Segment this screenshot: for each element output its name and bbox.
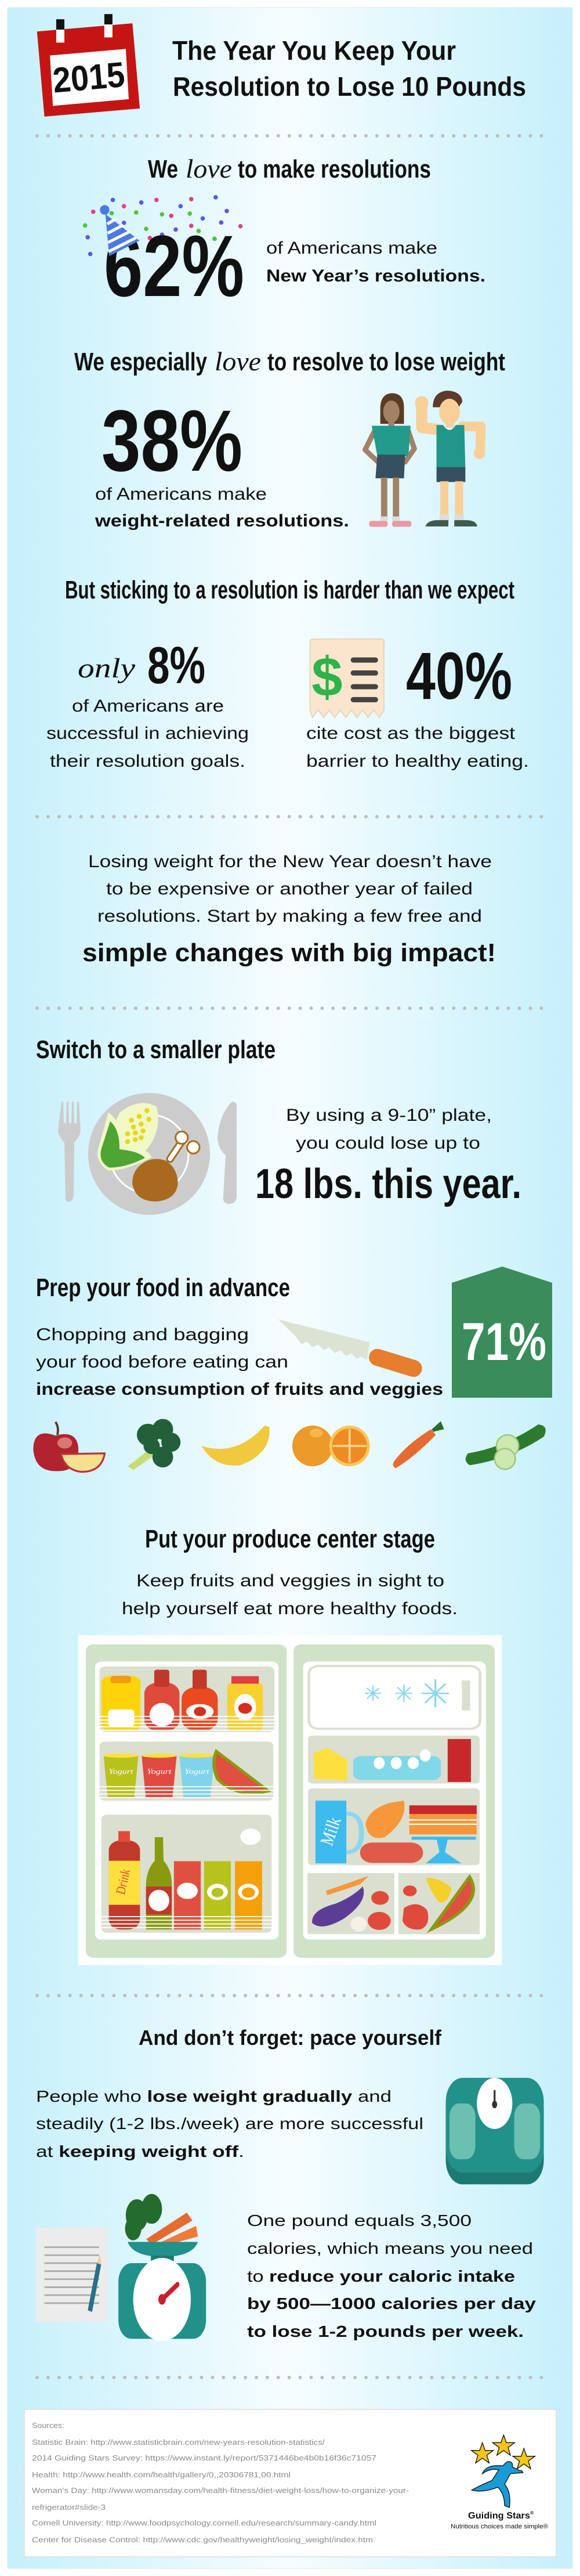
text: lose weight gradually [36,2087,423,2160]
intro paragraph: simple changes with big impact! [82,939,496,967]
text: one pound equals 3500 calories: to lose 1-2 pounds per week. [247,2322,524,2340]
icon: kitchen scale with vegetables [118,2194,206,2341]
text: lose weight gradually: steadily (1-2 lbs./week) are more successful [36,2115,423,2133]
icon: 2015 calendar: 2015 [51,55,126,100]
illustration: open fridge: Yogurt [184,1768,210,1776]
stat: 40%: cite cost as the biggest [306,724,516,743]
illustration: open fridge: Yogurt [147,1768,172,1776]
illustration: open fridge: Milk [316,1816,346,1848]
icon: receipt [310,639,384,717]
sources box: Statistic Brain: http://www.statisticbrain.com/new-years-resolution-statistics/ [32,2438,325,2447]
text: chopping and bagging: increase consumption of fruits and veggies [36,1380,443,1399]
intro paragraph [82,852,496,967]
stat: only 8%: their resolution goals. [50,752,245,771]
text: one pound equals 3500 calories: calories, which means you need [247,2239,533,2257]
62% statistic: 62% [104,217,244,315]
heading: Switch to a smaller plate: Switch to a smaller plate [36,1036,276,1064]
icon: receipt: $ [311,646,342,708]
sources box: Center for Disease Control: http://www.cdc.gov/healthyweight/losing_weight/index.htm [32,2536,373,2544]
title [172,35,526,102]
stat: 40% [306,639,529,771]
heading: We love to make resolutions: to make resolutions [238,155,431,183]
sources box: 2014 Guiding Stars Survey: https://www.instant.ly/report/5371446be4b0b16f36c71057 [32,2454,376,2462]
logo: Guiding Stars: ® [530,2510,534,2516]
stat: 40%: 40% [406,639,512,713]
icon: apple [33,1422,104,1472]
badge: 71%: 71% [462,1312,546,1372]
sources box: refrigerator#slide-3 [32,2503,106,2512]
sources box [24,2409,556,2557]
text: 9-10 inch plate, 18 lbs: you could lose up to [296,1134,480,1153]
icon: 2015 calendar [37,14,140,117]
icon: orange [292,1426,370,1466]
icon: broccoli [128,1419,180,1470]
text: of Americans make New Year's resolutions [266,239,485,286]
sources box: Health: http://www.health.com/health/gallery/0,,20306781,00.html [32,2471,291,2479]
stat: only 8%: only [78,653,136,684]
stat: 40%: barrier to healthy eating. [306,752,529,771]
38% statistic: 38% [102,392,242,489]
text: 9-10 inch plate, 18 lbs: By using a 9-10” plate, [286,1106,492,1125]
text: one pound equals 3500 calories: to reduce your caloric intake [247,2267,515,2285]
heading: And don't forget: pace yourself: And don’t forget: pace yourself [139,2026,442,2050]
icon: party hat and confetti [83,195,242,256]
heading: We especially love to resolve to lose weight [74,347,505,376]
sources box: Sources: [32,2422,64,2430]
sources box: Cornell University: http://www.foodpsychology.cornell.edu/research/summary-candy.html [32,2519,376,2527]
heading: We love to make resolutions: We [148,155,178,183]
text: one pound equals 3500 calories: by 500—1000 calories per day [247,2294,536,2312]
logo: Guiding Stars: Guiding Stars [468,2511,529,2521]
38% statistic [95,392,349,531]
icon: bathroom scale [446,2078,544,2184]
logo: Guiding Stars: Nutritious choices made simple® [451,2523,548,2530]
text: one pound equals 3500 calories [247,2211,536,2340]
icon: woman and man [365,391,485,527]
intro paragraph: to be expensive or another year of failed [106,879,473,899]
heading: We especially love to resolve to lose weight: We especially [74,348,207,376]
icon: carrot [393,1424,442,1468]
intro paragraph: resolutions. Start by making a few free and [97,907,482,926]
icon: banana [202,1426,270,1466]
38% statistic: weight-related resolutions. [95,511,349,531]
text: lose weight gradually: at keeping weight off . [36,2142,244,2160]
heading: Put your produce center stage: Put your produce center stage [145,1525,435,1553]
stat: only 8%: 8% [147,637,205,695]
text: one pound equals 3500 calories: One pound equals 3,500 [247,2211,472,2229]
sources box: Woman’s Day: http://www.womansday.com/health-fitness/diet-weight-loss/how-to-organize-your- [32,2487,409,2495]
title: Resolution to Lose 10 Pounds [173,71,526,102]
text: chopping and bagging: your food before eating can [36,1352,288,1372]
icon: plate with fork and knife [58,1093,237,1215]
text: keep fruits and veggies in sight: Keep fruits and veggies in sight to [136,1571,444,1590]
icon: cucumber [466,1424,546,1469]
text: 9-10 inch plate, 18 lbs: 18 lbs. this year. [255,1161,521,1207]
text: chopping and bagging: Chopping and bagging [36,1325,249,1344]
text: lose weight gradually: People who lose weight gradually and [36,2087,392,2105]
intro paragraph: Losing weight for the New Year doesn’t have [88,852,492,871]
text: keep fruits and veggies in sight [122,1571,458,1618]
text: 9-10 inch plate, 18 lbs [255,1106,521,1207]
title: The Year You Keep Your [172,35,456,66]
illustration: open fridge [78,1635,502,1965]
icon: knife [278,1319,424,1379]
text: keep fruits and veggies in sight: help yourself eat more healthy foods. [122,1599,458,1618]
badge: 71% [452,1267,552,1398]
heading: Prep your food in advance: Prep your food in advance [36,1273,290,1302]
stat: only 8%: successful in achieving [46,724,249,743]
text: of Americans make New Year's resolutions: of Americans make [266,239,437,258]
heading: We especially love to resolve to lose weight: love [215,347,261,376]
illustration: open fridge: Yogurt [108,1768,134,1776]
icon: notepad and pencil [36,2228,107,2322]
heading: We love to make resolutions [148,154,431,183]
heading: We love to make resolutions: love [186,154,232,183]
stat: only 8%: of Americans are [72,697,224,716]
illustration: open fridge: Drink [113,1868,133,1896]
38% statistic: of Americans make [95,485,267,504]
icons: fruits and vegetables row [33,1419,546,1472]
text: chopping and bagging [36,1325,443,1399]
heading: We especially love to resolve to lose weight: to resolve to lose weight [267,348,505,376]
text: of Americans make New Year's resolutions: New Year’s resolutions. [266,266,485,286]
logo: Guiding Stars [451,2435,548,2530]
stat: only 8% [46,637,249,771]
